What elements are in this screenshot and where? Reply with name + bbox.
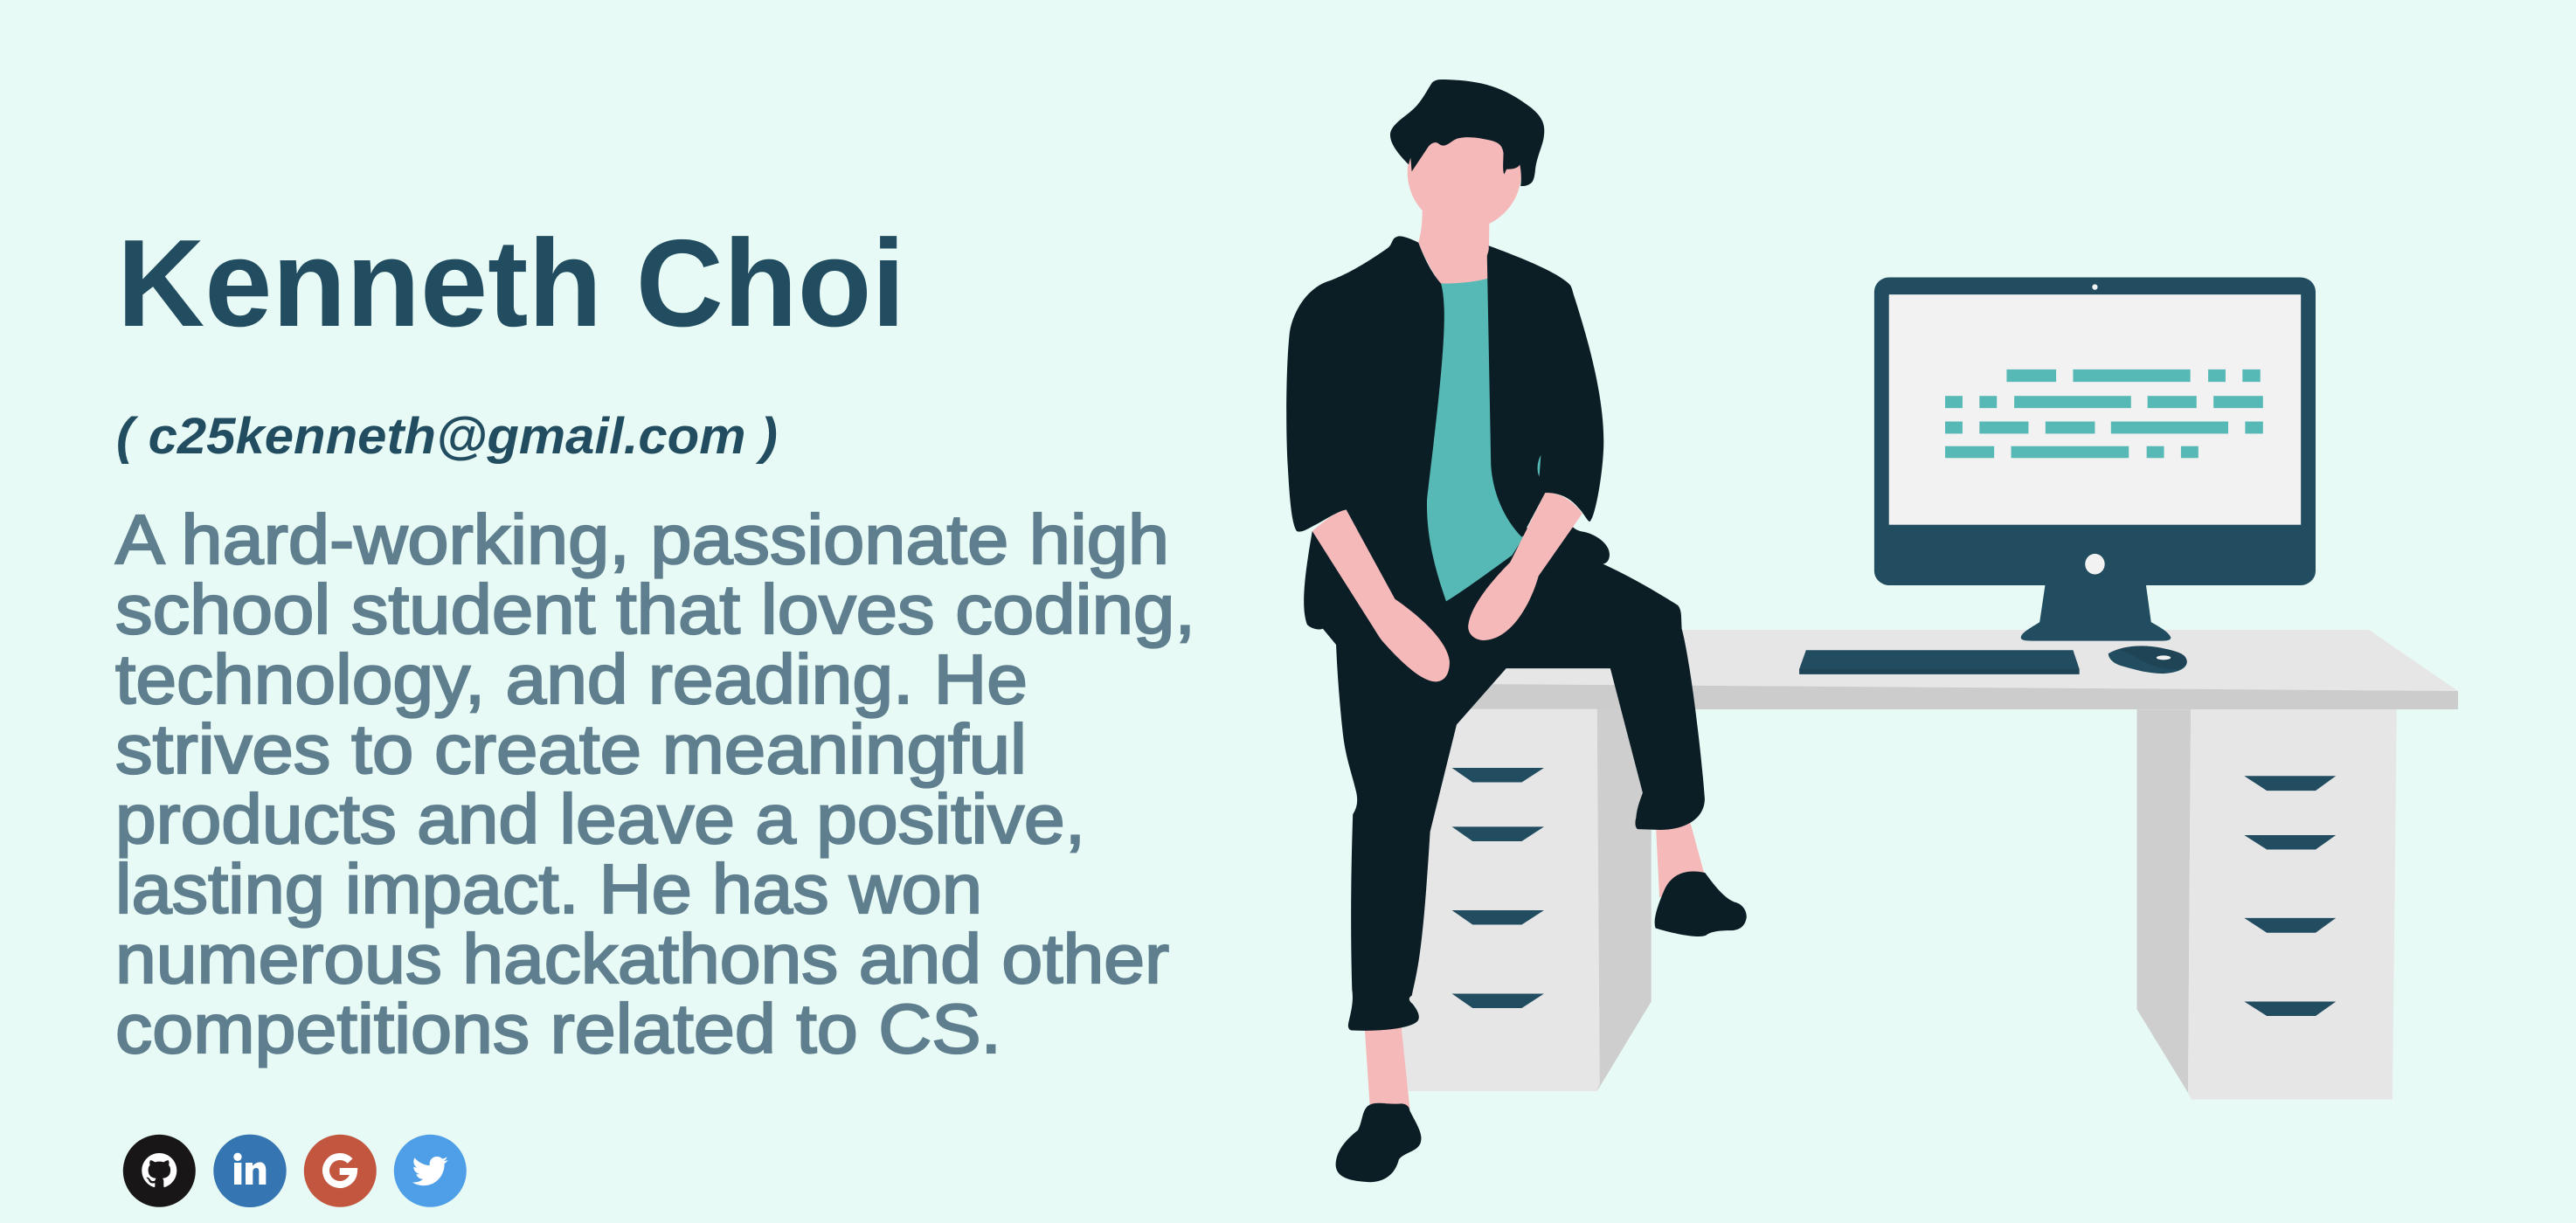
figure: seated person	[1286, 79, 1747, 1182]
code lines on screen	[1945, 370, 2263, 458]
monitor camera	[2092, 284, 2098, 290]
left drawer cabinet	[1395, 709, 1652, 1091]
bio text block: school student that loves coding,	[115, 570, 1195, 648]
bio text block: technology, and reading. He	[115, 640, 1028, 718]
social icons row	[123, 1135, 467, 1207]
icon: github	[123, 1135, 196, 1207]
icon: twitter	[394, 1135, 467, 1207]
icon: google	[304, 1135, 377, 1207]
monitor stand	[2021, 583, 2171, 641]
desk top surface	[1477, 630, 2458, 691]
left lower leg	[1365, 1023, 1409, 1109]
left shoe	[1336, 1103, 1421, 1182]
bio text block: numerous hackathons and other	[115, 920, 1169, 998]
right shoe	[1655, 872, 1747, 936]
bio text block: products and leave a positive,	[115, 780, 1085, 858]
email: ( c25kenneth@gmail.com )	[116, 408, 778, 465]
right lower leg	[1656, 819, 1706, 898]
desk front edge	[1468, 684, 2458, 709]
bio text block: A hard-working, passionate high	[115, 501, 1169, 578]
left arm	[1312, 509, 1450, 681]
illustration: desk scene	[1286, 79, 2458, 1182]
mouse	[2109, 646, 2187, 674]
bio text block: lasting impact. He has won	[115, 850, 982, 928]
keyboard	[1799, 650, 2080, 674]
icon: linkedin	[213, 1135, 287, 1207]
right drawer cabinet	[2137, 709, 2397, 1100]
bio text block	[115, 501, 1195, 1068]
hair	[1390, 79, 1544, 186]
head and neck	[1408, 115, 1521, 286]
title: Kenneth Choi	[117, 214, 905, 353]
right arm	[1468, 493, 1582, 640]
monitor button	[2085, 554, 2105, 574]
monitor, keyboard and mouse	[1799, 277, 2316, 674]
teal shirt	[1424, 279, 1524, 601]
trousers	[1304, 528, 1705, 1031]
jacket right panel	[1487, 245, 1603, 537]
monitor screen	[1889, 294, 2301, 525]
bio text block: competitions related to CS.	[115, 990, 1001, 1068]
shirt sliver	[1538, 455, 1541, 477]
jacket left panel	[1286, 236, 1446, 601]
bio text block: strives to create meaningful	[115, 710, 1027, 788]
monitor body	[1874, 277, 2316, 585]
